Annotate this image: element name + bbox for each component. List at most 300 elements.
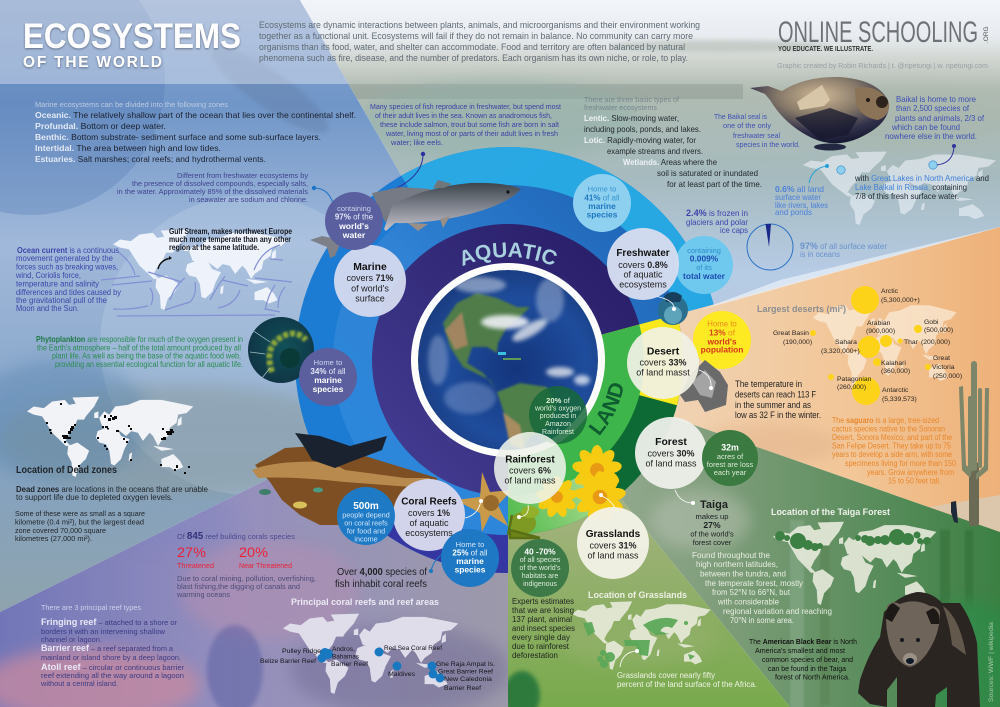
circle: 97% of world's water: world's [338, 221, 369, 231]
illustration: starfish [456, 472, 512, 532]
text: taiga description: the temperate forest, mostly [705, 579, 803, 588]
text: taiga description: regional variation and reaching [723, 607, 832, 616]
world map: largest deserts: Arabian [867, 320, 891, 327]
text: phytoplankton [36, 335, 243, 369]
world map: principal coral reefs: Andros, [332, 646, 355, 653]
circle: 20% of oxygen: Rainforest [542, 429, 574, 436]
circle: 40-70% of species: of the world's [519, 565, 561, 572]
text: Gulf Stream [169, 227, 293, 252]
text: seal callout: freshwater seal [733, 131, 780, 140]
text: reef types: Barrier reef – a reef separated from a [41, 643, 174, 653]
text: 97% surface water [800, 241, 887, 259]
logo: Online Schooling: Graphic created by Robin Richards | t. @ripetungi | w. ripetungi.com [777, 61, 988, 70]
circle: 34% of marine species: marine [314, 375, 342, 385]
earth globe [418, 270, 598, 450]
text: freshwater types: There are three basic types of [584, 95, 680, 104]
text: saguaro: years to develop a side arm, with some [832, 450, 952, 459]
world map: principal coral reefs: New Caledonia [444, 676, 492, 683]
world map: largest deserts: (260,000) [837, 384, 866, 391]
text: coral threat stats: Of 845 reef building corals species [177, 531, 295, 542]
world map: principal coral reefs [260, 614, 495, 694]
circle: grasslands: of land mass [587, 550, 639, 560]
text: coral threat stats [176, 531, 316, 599]
text: marine zones: Oceanic. The relatively shallow part of the ocean that lies over the continental shelf. [35, 110, 356, 120]
text: ocean current: differences and tides caused by [16, 288, 121, 297]
connectors: fish callouts [312, 152, 425, 203]
circle: 34% of marine species: 34% of all [310, 367, 346, 376]
text: location of dead zones: kilometre (0.4 mi²), but the largest dead [15, 518, 144, 526]
intro text: phenomena such as fire, disease, and the number of predators. Each organism has its own niche, or role, to play. [259, 53, 688, 63]
callout connectors: lakes [809, 144, 956, 183]
world map: principal coral reefs: Bahamas [332, 654, 360, 660]
text: 4,000 fish species: fish inhabit coral reefs [335, 579, 427, 590]
circle: 20% of oxygen [529, 386, 587, 444]
text: location of dead zones: to support life due to depleted oxygen levels. [16, 493, 173, 502]
circle: forest [635, 417, 707, 489]
circle: marine [334, 245, 406, 317]
text: freshwater types: Lentic. Slow-moving water, [584, 114, 679, 123]
circle: 32m acres lost: 32m [721, 442, 739, 452]
illustration: coral [252, 433, 437, 525]
circle: grasslands: covers 31% [589, 540, 637, 550]
circle: 500m people: people depend [342, 510, 390, 520]
circle: 25% of marine species: Home to [456, 540, 484, 549]
text: 97% surface water: is in oceans [800, 250, 840, 259]
text: 0.6% land surface water: 0.6% all land [775, 185, 824, 194]
world map: largest deserts: Arctic [881, 288, 899, 295]
text: marine zones: Profundal. Bottom or deep water. [35, 121, 166, 131]
circle: forest: covers 30% [647, 448, 695, 458]
text: 2.4% frozen: ice caps [720, 226, 748, 235]
text: coral threat stats: 27% [177, 544, 206, 560]
circle: 500m people: on coral reefs [344, 518, 388, 528]
text: grasslands africa [617, 671, 757, 689]
text: ocean current [15, 246, 121, 313]
logo: Online Schooling: YOU EDUCATE. WE ILLUSTRATE. [778, 46, 873, 53]
intro text: organisms than its food, water, and shelter can accommodate. Food and territory are often balanced by natural [259, 42, 685, 52]
circle: rainforest [494, 432, 566, 504]
text: rainforest deforestation: 137 plant, animal [512, 615, 572, 624]
text: taiga description: Found throughout the [692, 551, 770, 560]
circle: rainforest: of land mass [504, 476, 556, 486]
text: taiga: Taiga [700, 499, 729, 511]
circle: 13% of world's population: world's [707, 336, 737, 346]
world map: principal coral reefs: Barrier Reef [331, 661, 368, 668]
circle: 97% of world's water [325, 192, 383, 250]
text: saguaro [832, 416, 957, 486]
text: black bear: The American Black Bear is North [749, 637, 857, 646]
text: ocean current: movement generated by the [16, 254, 114, 263]
text: reef types: There are 3 principal reef types [41, 603, 141, 612]
text: 97% surface water: 97% of all surface water [800, 241, 887, 251]
circle: 32m acres lost: forest are loss [707, 460, 754, 469]
heading: AQUATIC [398, 257, 618, 360]
world map: grasslands [572, 589, 711, 670]
circle: 20% of oxygen: produced in [540, 413, 576, 420]
world map: largest deserts: Kalahari [881, 360, 906, 367]
text: Baikal callout: plants and animals, 2/3 of [895, 114, 985, 123]
text: ocean current: Ocean current is a continuous [17, 246, 119, 255]
illustration: salmon [310, 180, 521, 258]
text: Baikal callout [885, 95, 985, 141]
circle: grasslands: Grasslands [586, 529, 641, 540]
world map: principal coral reefs: Barrier Reef [444, 685, 481, 692]
text: Gulf Stream: Gulf Stream, makes northwest Europe [169, 227, 293, 236]
world map: grasslands: Location of Grasslands [588, 589, 687, 600]
circle: grasslands [577, 507, 649, 579]
circle: desert: of land masst [636, 368, 690, 378]
text: desert temperature: in the summer and as [735, 400, 812, 410]
text: 0.6% land surface water: and ponds [775, 208, 812, 217]
panel: marine background [0, 0, 402, 612]
text: phytoplankton: plant life. As well as being the base of the aquatic food web, [52, 352, 241, 360]
text: coral threat stats: Due to coral mining, pollution, overfishing, [177, 574, 316, 583]
text: taiga: makes up [696, 512, 728, 521]
text: marine zones: Intertidal. The area between high and low tides. [35, 143, 221, 153]
text: taiga [675, 490, 734, 547]
text: coral threat stats: warming oceans [176, 590, 230, 599]
text: Gulf Stream: region at the same latitude. [169, 243, 259, 252]
circle: 34% of marine species: Home to [314, 358, 342, 367]
circle: 500m people: for food and [347, 526, 385, 536]
text: sources: Sources: WWF | wikipedia [988, 622, 995, 702]
circle: marine: covers 71% [346, 273, 394, 283]
intro text [259, 20, 700, 63]
text: rainforest deforestation: deforestation [512, 651, 558, 660]
text: freshwater types: freshwater ecosystems [584, 103, 657, 112]
text: black bear: America's smallest and most [755, 646, 846, 655]
text: coral threat stats: Near Threatened [239, 561, 292, 570]
circle: desert: Desert [647, 346, 680, 358]
circle: 20% of oxygen: Amazon [545, 421, 571, 428]
circle: freshwater: covers 0.8% [618, 260, 668, 270]
text: grasslands africa: percent of the land surface of the Africa. [617, 680, 757, 689]
text: desert temperature [735, 379, 821, 420]
text: 4,000 fish species [335, 552, 446, 590]
text: location of dead zones: Some of these were as small as a square [15, 509, 145, 518]
circle: 500m people: 500m [353, 501, 379, 512]
logo: Online Schooling [777, 16, 990, 70]
text: Baikal callout: than 2,500 species of [896, 104, 970, 113]
circle: 0.009% of total water: containing [687, 246, 721, 255]
circle: 32m acres lost [702, 430, 758, 486]
text: taiga description: 70°N in some area. [730, 616, 794, 625]
text: Great Lakes and Baikal: with Great Lakes in North America and [854, 174, 989, 183]
text: seal callout [714, 112, 800, 149]
text: saguaro: specimens living for more than 150 [845, 459, 957, 468]
title: OF THE WORLD [23, 54, 162, 71]
circle: freshwater: Freshwater [616, 248, 670, 259]
text: reef types: channel or lagoon. [41, 635, 102, 644]
world map: principal coral reefs: Great Barrier Reef [438, 668, 493, 676]
text: Great Lakes and Baikal [854, 174, 989, 201]
text: grasslands africa: Grasslands cover nearly fifty [617, 671, 715, 680]
world map: taiga forest [771, 506, 936, 605]
world map: principal coral reefs: Red Sea Coral Reef [384, 645, 442, 652]
circle: 25% of marine species [441, 529, 499, 587]
text: 4,000 fish species: Over 4,000 species of [337, 567, 427, 578]
icon: Baikal seal [750, 77, 889, 150]
world map: largest deserts: Sahara [835, 339, 857, 346]
circle: 25% of marine species: 25% of all [452, 548, 488, 558]
icon: phytoplankton [248, 317, 314, 383]
text: taiga description: between the tundra, and [700, 570, 786, 578]
text: phytoplankton: providing an essential ecological function for all aquatic life. [55, 360, 243, 369]
world map: largest deserts: Antarctic [882, 387, 909, 394]
world map: principal coral reefs: Belize Barrier Reef [260, 658, 316, 665]
circle: 13% of world's population: population [701, 344, 743, 354]
world map: lakes [803, 152, 996, 225]
land rings [508, 318, 683, 534]
text: coral threat stats: Threatened [177, 561, 214, 570]
circle: 20% of oxygen: 20% of [546, 396, 571, 405]
text: salt water callout: Different from freshwater ecosystems by [177, 171, 308, 180]
circle: 20% of oxygen: world's oxygen [534, 406, 581, 412]
aquatic rings [295, 147, 721, 573]
text: taiga description: with considerable [717, 598, 779, 606]
text: salt water callout [117, 171, 308, 204]
circle: freshwater: ecosystems [619, 280, 667, 290]
world map: dead zones [27, 397, 193, 477]
world map: largest deserts: (250,000) [933, 373, 962, 380]
text: desert temperature: deserts can reach 113 F [735, 390, 817, 400]
heading: principal coral reefs: Principal coral reefs and reef areas [291, 597, 439, 607]
text: salt water callout: in the water. Approximately 85% of the dissolved materials [117, 187, 308, 196]
text: marine zones: Benthic. Bottom substrate- sediment surface and some sub-surface layers. [35, 132, 321, 142]
circle: 13% of world's population: Home to [707, 320, 737, 328]
text: taiga: 27% [703, 520, 721, 530]
panel: freshwater background [300, 0, 1000, 304]
world map: principal coral reefs: Maldives [388, 671, 416, 678]
text: saguaro: years. Grow anywhere from [867, 468, 954, 477]
text: 0.6% land surface water: like rivers, lakes [775, 201, 828, 210]
text: desert temperature: The temperature in [735, 379, 802, 389]
text: reef types: without a central island. [40, 679, 118, 688]
text: taiga: of the world's [690, 530, 734, 538]
text: freshwater types: soil is saturated or inundated [657, 169, 758, 178]
circle: 40-70% of species: 40 -70% [524, 546, 556, 556]
text: reef types: Atoll reef – circular or continuous barrier [41, 662, 185, 672]
text: rainforest deforestation: Experts estimates [512, 597, 574, 606]
text: marine zones [35, 100, 356, 164]
world map: principal coral reefs: Pulley Ridge [282, 648, 321, 655]
text: rainforest deforestation: that we are losing [512, 606, 574, 615]
circle: 0.009% of total water: 0.009% [690, 254, 719, 264]
world map: largest deserts: Great Basin [773, 330, 809, 337]
circle: marine: of world's [351, 284, 389, 294]
text: ocean current: forces such as breaking waves, [16, 262, 118, 272]
world map: largest deserts: (360,000) [881, 368, 910, 375]
icon: saguaro cactus [951, 361, 989, 526]
title [23, 17, 241, 71]
text: phytoplankton: the Earth's atmosphere – half of the total amount produced by all [37, 344, 241, 352]
circle: 25% of marine species: species [455, 564, 486, 574]
circle: coral reefs: ecosystems [405, 528, 453, 538]
text: rainforest deforestation: every single day [512, 633, 570, 642]
world map: largest deserts: Great [933, 355, 950, 362]
circle: rainforest: covers 6% [509, 466, 551, 476]
text: desert temperature: low as 32 F in the winter. [735, 410, 821, 420]
text: rainforest deforestation [512, 597, 575, 660]
world map: largest deserts: (3,320,000+) [821, 348, 860, 355]
circle: 32m acres lost: acres of [717, 452, 744, 461]
world map: principal coral reefs: Ghe Raja Ampat Is. [436, 661, 495, 668]
circle: 40-70% of species: of all species [520, 557, 561, 564]
concentric ecosystem diagram [296, 147, 714, 573]
text: black bear: common species of bear, and [762, 655, 853, 664]
heading: LAND [568, 343, 627, 463]
intro text: together as a functional unit. Ecosystems will fail if they do not remain in balance. No community can carry more [259, 31, 693, 41]
world map: ocean currents [101, 230, 292, 316]
text: anadromous fish callout: water; like eels. [390, 138, 443, 147]
text: freshwater types: Wetlands. Areas where the [623, 158, 717, 167]
text: black bear [749, 637, 857, 682]
text: Baikal callout: nowhere else in the world. [885, 132, 977, 141]
circle: forest: Forest [655, 437, 687, 448]
text: freshwater types [584, 95, 762, 189]
circle: 0.009% of total water: of its [696, 263, 712, 272]
white earth border [411, 263, 605, 457]
circle: desert [627, 327, 699, 399]
text: reef types: borders it with an intervening shallow [41, 627, 166, 636]
text: freshwater types: including pools, ponds, and lakes. [584, 125, 701, 134]
concentric ecosystem diagram: LAND [588, 383, 623, 436]
text: Great Lakes and Baikal: Lake Baikal in Russia, containing [855, 183, 967, 192]
circle: 41% of marine species: Home to [588, 184, 616, 194]
circle: marine: surface [355, 294, 385, 304]
text: 2.4% frozen: 2.4% is frozen in [686, 208, 748, 218]
world map: largest deserts: Victoria [932, 364, 955, 371]
circle: 13% of world's population [693, 311, 751, 369]
text: taiga description [692, 551, 832, 625]
text: rainforest deforestation: and insect species [512, 624, 575, 633]
text: Great Lakes and Baikal: 7/8 of this fresh surface water. [855, 192, 959, 201]
circle: desert: covers 33% [639, 358, 687, 368]
circle: 500m people: income [354, 534, 378, 544]
text: salt water callout: in seawater are sodium and chlorine. [189, 195, 308, 204]
circle: 41% of marine species: 41% of all [584, 194, 620, 202]
text: marine zones: Estuaries. Salt marshes; coral reefs; and hydrothermal vents. [35, 154, 266, 164]
text: salt water callout: the presence of dissolved compounds, especially salts, [132, 179, 308, 188]
text: coral threat stats: 20% [239, 544, 268, 560]
illustration: tree frog [508, 505, 540, 538]
text: saguaro: The saguaro is a large, tree-sized [832, 416, 939, 425]
icon: water drop [655, 292, 688, 325]
world map: taiga forest: Location of the Taiga Forest [771, 506, 890, 517]
circle: 41% of marine species [573, 174, 631, 232]
text: reef types: mainland or island shore by a deep lagoon. [41, 653, 181, 662]
logo: Online Schooling: .ORG [983, 26, 990, 43]
circle: marine: Marine [353, 262, 387, 273]
title: ECOSYSTEMS [23, 17, 241, 56]
circle: 40-70% of species: indigenous [523, 581, 557, 588]
world map: largest deserts: (500,000) [924, 327, 953, 334]
text: saguaro: cactus species native to the Sonoran [832, 424, 945, 434]
world map: largest deserts: Thar [904, 339, 919, 346]
pie chart: surface water [747, 224, 793, 270]
circle: coral reefs: of aquatic [409, 518, 449, 528]
text: taiga description: high northern latitudes, [696, 560, 778, 569]
text: seal callout: The Baikal seal is [714, 112, 767, 121]
text: ocean current: Moon and the Sun. [16, 304, 79, 313]
text: 2.4% frozen: glaciers and polar [686, 218, 748, 227]
world map: largest deserts: (900,000) [866, 328, 895, 335]
text: reef types: Fringing reef – attached to a shore or [41, 617, 178, 627]
text: saguaro: 15 to 50 feet tall. [888, 476, 941, 486]
circle: 41% of marine species: marine [588, 201, 616, 211]
text: Gulf Stream: much more temperate than any other [169, 235, 291, 244]
text: freshwater types: example streams and rivers. [607, 147, 703, 156]
circle: 13% of world's population: 13% of [709, 328, 736, 338]
text: black bear: can be found in the Taiga [768, 664, 847, 673]
text: ocean current: wind, Coriolis force, [15, 271, 81, 280]
panel: taiga forest background [620, 424, 1000, 707]
world map: largest deserts [773, 286, 962, 405]
text: freshwater types: for at least part of the time. [667, 180, 762, 189]
text: saguaro: San Felipe Desert. They take up to 75 [832, 442, 952, 450]
world map: largest deserts: Gobi [924, 319, 939, 326]
circle: coral reefs [393, 479, 483, 551]
text: reef types: reef extending all the way around a lagoon [41, 671, 184, 680]
circle: 34% of marine species: species [313, 384, 344, 394]
text: ocean current: the gravitational pull of the [16, 296, 108, 305]
icon: desert rock [680, 360, 728, 412]
text: seal callout: species in the world. [736, 140, 800, 149]
text: location of dead zones [15, 465, 209, 543]
text: anadromous fish callout: Many species of fish reproduce in freshwater, but spend most [370, 102, 562, 111]
circle: forest: of land mass [645, 458, 697, 468]
text: saguaro: Desert, Sonora Mexico, and part of the [832, 433, 952, 442]
heading: largest deserts: Largest deserts (mi²) [757, 304, 846, 315]
panel: grasslands background [508, 498, 790, 707]
illustration: bear [858, 592, 980, 707]
text: taiga: forest cover [693, 538, 732, 547]
circle: 25% of marine species: marine [456, 556, 484, 566]
concentric ecosystem diagram: AQUATIC [462, 242, 557, 266]
circle: coral reefs: Coral Reefs [401, 496, 457, 508]
panel: desert background [508, 227, 1000, 532]
arrow: Gulf Stream [158, 256, 172, 269]
circle: rainforest: Rainforest [505, 454, 555, 466]
text: 2.4% frozen [686, 208, 748, 235]
text: location of dead zones: kilometres (27,000 mi²). [15, 534, 92, 543]
text: Baikal callout: Baikal is home to more [896, 95, 976, 104]
circle: 97% of world's water: 97% of the [335, 212, 374, 222]
circle: 40-70% of species: habitats are [522, 573, 558, 580]
circle: 34% of marine species [299, 348, 357, 406]
circle: 500m people [337, 487, 395, 545]
text: Baikal callout: which can be found [891, 123, 960, 132]
text: rainforest deforestation: due to rainforest [512, 642, 570, 651]
circle: freshwater [607, 228, 679, 300]
circle: 40-70% of species [511, 539, 569, 597]
text: 0.6% land surface water: surface water [775, 193, 821, 202]
text: anadromous fish callout: these include salmon, trout but some fish are born in salt [380, 120, 560, 129]
intro text: Ecosystems are dynamic interactions between plants, animals, and microorganisms and their environment working [259, 20, 700, 30]
text: freshwater types: Lotic. Rapidly-moving water, for [584, 136, 696, 145]
text: location of dead zones: zone covered 70,000 square [15, 526, 106, 535]
circle: coral reefs: covers 1% [408, 508, 450, 518]
text: ocean current: temperature and salinity [16, 280, 99, 288]
panel: coral reefs background [0, 480, 508, 707]
text: reef types [40, 603, 185, 688]
circle: 41% of marine species: species [587, 210, 618, 220]
circle: 32m acres lost: each year [714, 468, 747, 477]
text: anadromous fish callout [370, 102, 562, 147]
text: marine zones: Marine ecosystems can be divided into the following zones [35, 100, 228, 109]
circle: 0.009% of total water: total water [683, 271, 726, 281]
world map: largest deserts: Patagonian [837, 376, 872, 383]
